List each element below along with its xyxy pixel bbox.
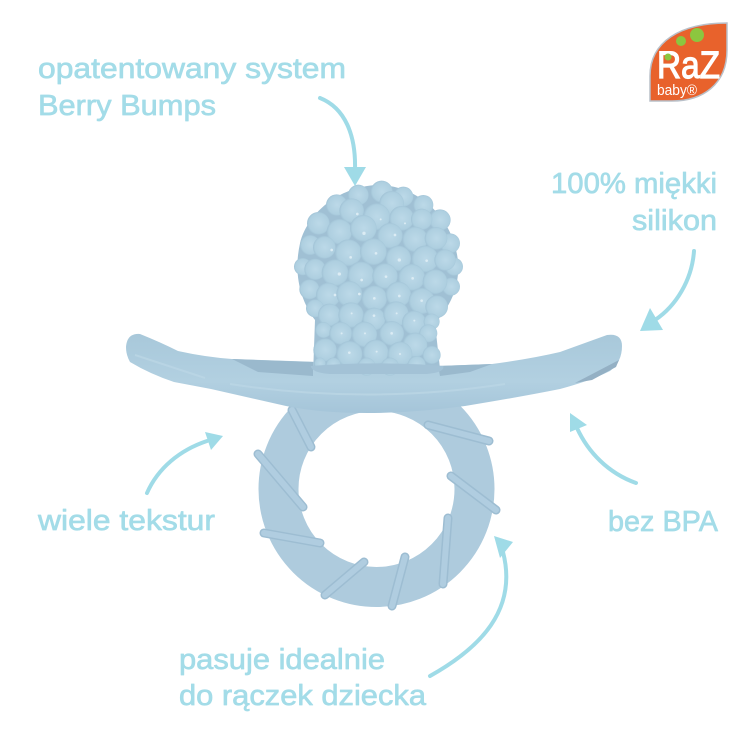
label: opatentowany system Berry Bumps: Berry Bumps xyxy=(38,90,216,122)
label: pasuje idealnie do raczek dziecka xyxy=(179,644,427,712)
logo: RaZ baby xyxy=(650,23,727,101)
arrow: to ring left xyxy=(147,432,223,493)
label: 100% miekki silikon xyxy=(551,168,717,237)
arrow: to shield right xyxy=(640,251,694,331)
teething ring xyxy=(258,391,496,606)
label: opatentowany system Berry Bumps xyxy=(38,53,346,122)
label: bez BPA: bez BPA xyxy=(608,506,719,538)
logo: RaZ baby: RaZ xyxy=(657,45,720,87)
teether product xyxy=(126,181,622,606)
arrow: to shield underside xyxy=(570,413,636,483)
label: opatentowany system Berry Bumps: opatentowany system xyxy=(38,53,346,85)
label: pasuje idealnie do raczek dziecka: pasuje idealnie xyxy=(179,644,385,676)
arrow: to ring right xyxy=(430,536,513,676)
label: 100% miekki silikon: silikon xyxy=(632,205,717,237)
label: 100% miekki silikon: 100% miękki xyxy=(551,168,717,200)
shield xyxy=(126,334,622,413)
label: wiele tekstur: wiele tekstur xyxy=(37,505,215,537)
berry bumps head xyxy=(294,181,463,376)
label: pasuje idealnie do raczek dziecka: do rączek dziecka xyxy=(179,680,427,712)
logo: RaZ baby: baby® xyxy=(657,82,697,99)
arrow: to berry head xyxy=(320,98,366,186)
